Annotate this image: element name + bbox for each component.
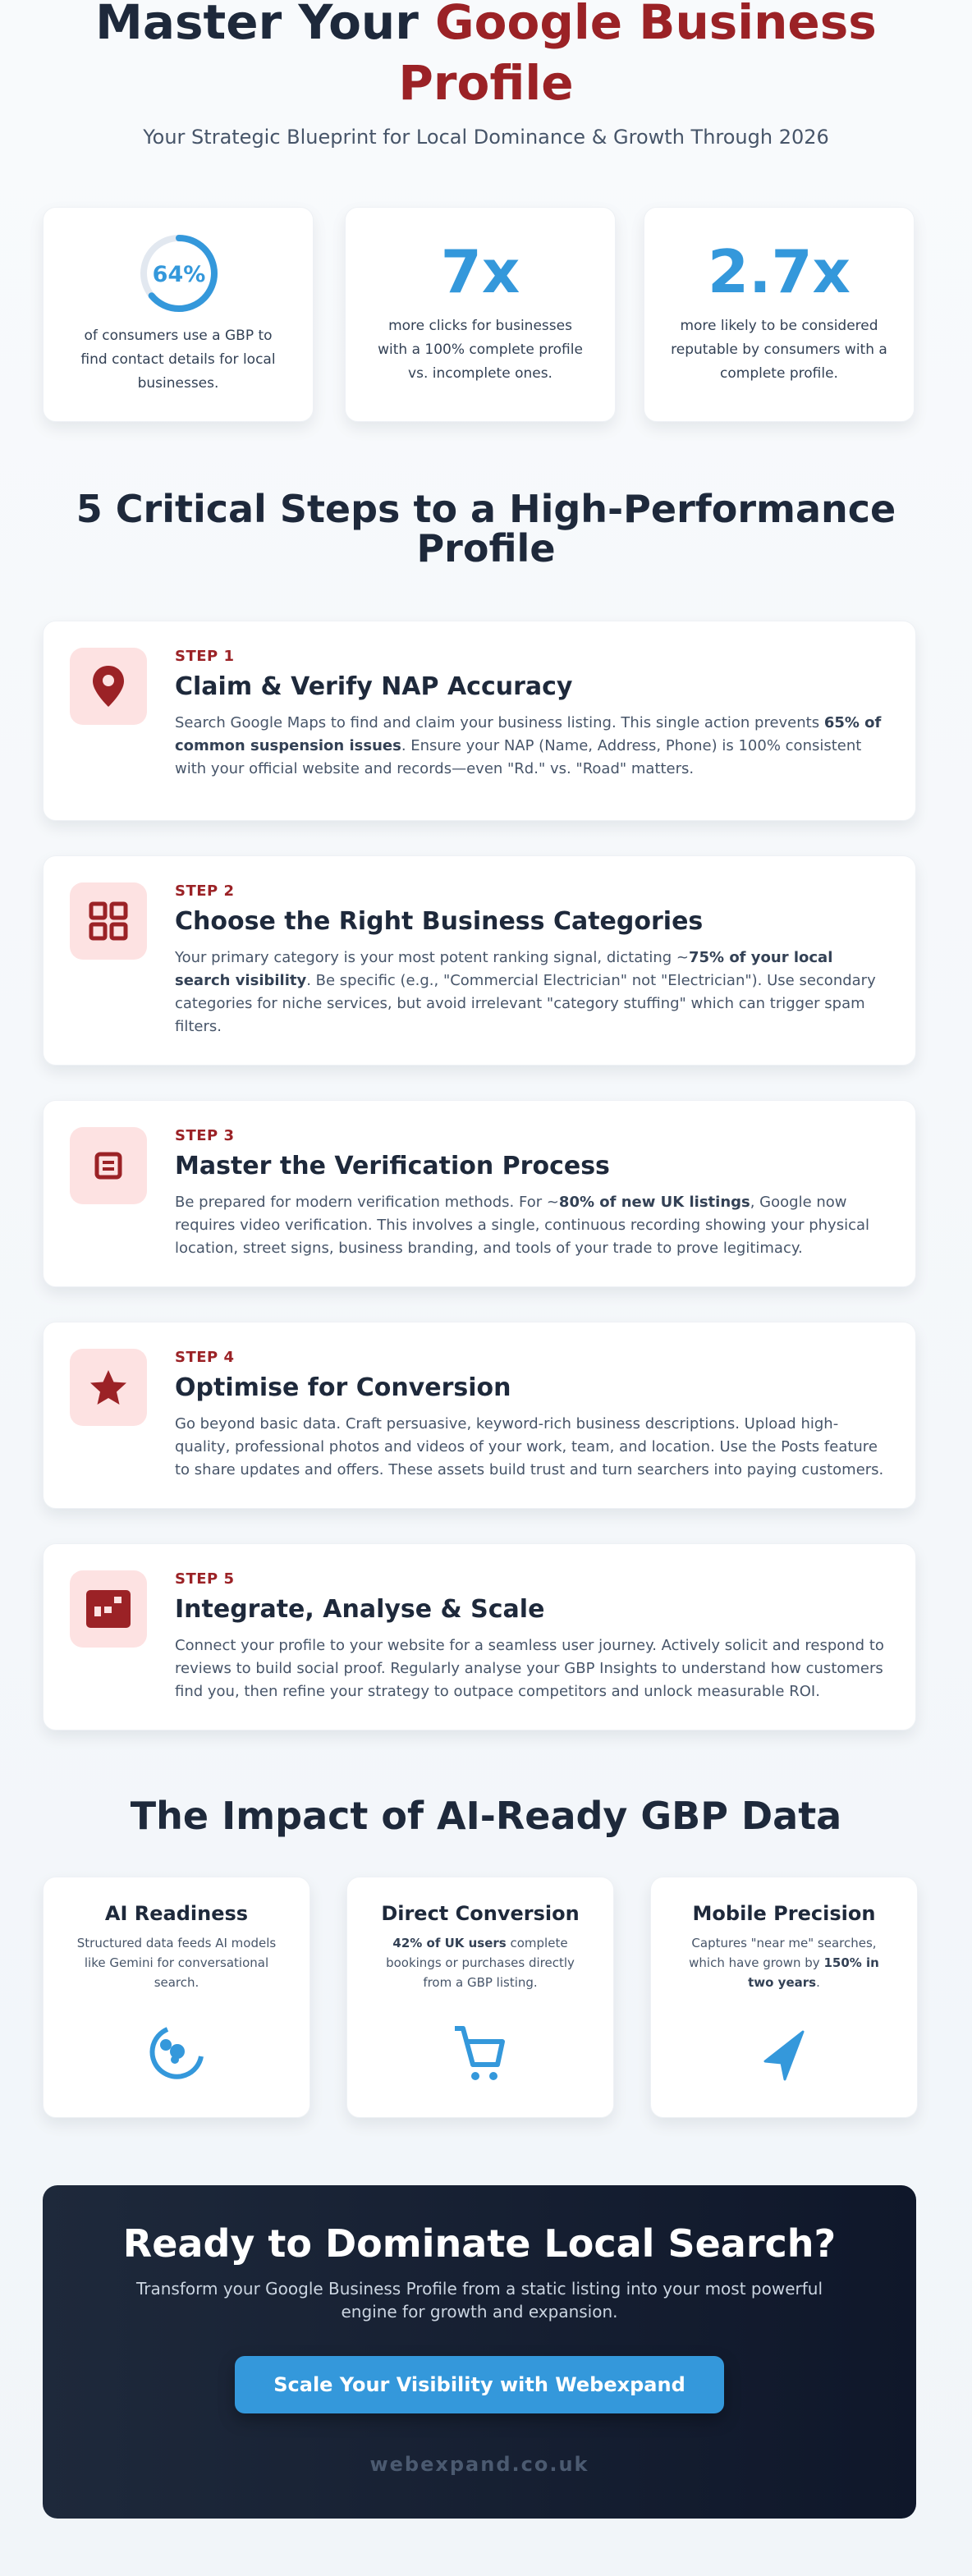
panel: step 2 [43,855,916,1066]
stat text: more clicks for businesses with a 100% complete profile vs. incomplete ones. [378,318,583,382]
title [95,0,877,111]
step title: Master the Verification Process [175,1152,610,1180]
icon: cart [455,2026,505,2080]
section heading: steps [76,487,896,571]
card title: AI Readiness [105,1902,248,1925]
step title: Optimise for Conversion [175,1373,511,1402]
panel: step 3 [43,1100,916,1287]
panel: CTA [43,2185,916,2519]
icon: dashboard [70,1570,147,1648]
icon: map pin [70,648,147,725]
CTA button [235,2356,724,2413]
stat card: 64% [43,207,314,422]
icon: document [70,1127,147,1204]
panel: step 4 [43,1322,916,1509]
stat text: more likely to be considered reputable by consumers with a complete profile. [671,318,887,382]
panel: AI readiness [43,1877,310,2118]
step title: Integrate, Analyse & Scale [175,1595,544,1624]
step body: Your primary category is your most potent ranking signal, dictating ~75% of your local search visibility. Be specific (e.g., "Commercial Electrician" not "Electrician"). Use secondary categories for niche services, but avoid irrelevant "category stuffing" which can trigger spam filters. [175,949,876,1035]
section heading: steps: 5 Critical Steps to a High-Performance [76,487,896,531]
step label: STEP 5 [175,1570,235,1588]
section heading: impact: The Impact of AI-Ready GBP Data [131,1794,841,1838]
step label: STEP 2 [175,882,235,900]
CTA button: Scale Your Visibility with Webexpand [273,2373,685,2396]
icon: star [70,1349,147,1426]
card body: Structured data feeds AI models like Gemini for conversational search. [77,1936,276,1990]
big number: 2.7x [708,237,850,306]
subtitle: Your Strategic Blueprint for Local Dominance & Growth Through 2026 [143,126,829,149]
step title: Choose the Right Business Categories [175,907,703,936]
footer url: webexpand.co.uk [369,2453,589,2476]
card title: Mobile Precision [693,1902,875,1925]
card title: Direct Conversion [381,1902,580,1925]
step body: Be prepared for modern verification methods. For ~80% of new UK listings, Google now requires video verification. This involves a single, continuous recording showing your physical location, street signs, business branding, and tools of your trade to prove legitimacy. [175,1194,869,1257]
card body: Captures "near me" searches, which have grown by 150% in two years. [689,1936,879,1990]
section heading: steps: Profile [416,526,556,571]
step body: Connect your profile to your website for a seamless user journey. Actively solicit and respond to reviews to build social proof. Regularly analyse your GBP Insights to understand how customers find you, then refine your strategy to outpace competitors and unlock measurable ROI. [175,1637,884,1700]
step label: STEP 1 [175,648,235,665]
panel: mobile precision [650,1877,918,2118]
icon: navigation arrow [763,2031,805,2080]
panel: step 5 [43,1543,916,1730]
icon: progress ring 64%: 64% [153,262,205,287]
step label: STEP 4 [175,1349,235,1366]
stat card: 2.7x [644,207,915,422]
CTA heading: Ready to Dominate Local Search? [123,2221,836,2266]
icon: AI orbit [149,2027,204,2079]
big number: 7x [441,237,520,306]
icon: grid [70,882,147,960]
CTA text: Transform your Google Business Profile from a static listing into your most powerful engine for growth and expansion. [136,2279,823,2322]
step title: Claim & Verify NAP Accuracy [175,672,572,701]
stat card: 7x [345,207,616,422]
card body: 42% of UK users complete bookings or purchases directly from a GBP listing. [386,1936,575,1990]
step body: Search Google Maps to find and claim your business listing. This single action prevents 65% of common suspension issues. Ensure your NAP (Name, Address, Phone) is 100% consistent with your official website and records—even "Rd." vs. "Road" matters. [175,714,881,777]
stat text: of consumers use a GBP to find contact details for local businesses. [80,328,276,392]
step label: STEP 3 [175,1127,235,1144]
step body: Go beyond basic data. Craft persuasive, keyword-rich business descriptions. Upload high-quality, professional photos and videos of your work, team, and location. Use the Posts feature to share updates and offers. These assets build trust and turn searchers into paying customers. [175,1415,883,1478]
panel: direct conversion [346,1877,614,2118]
title: Profile [398,55,574,111]
panel: step 1 [43,621,916,821]
icon: progress ring 64% [140,235,218,312]
